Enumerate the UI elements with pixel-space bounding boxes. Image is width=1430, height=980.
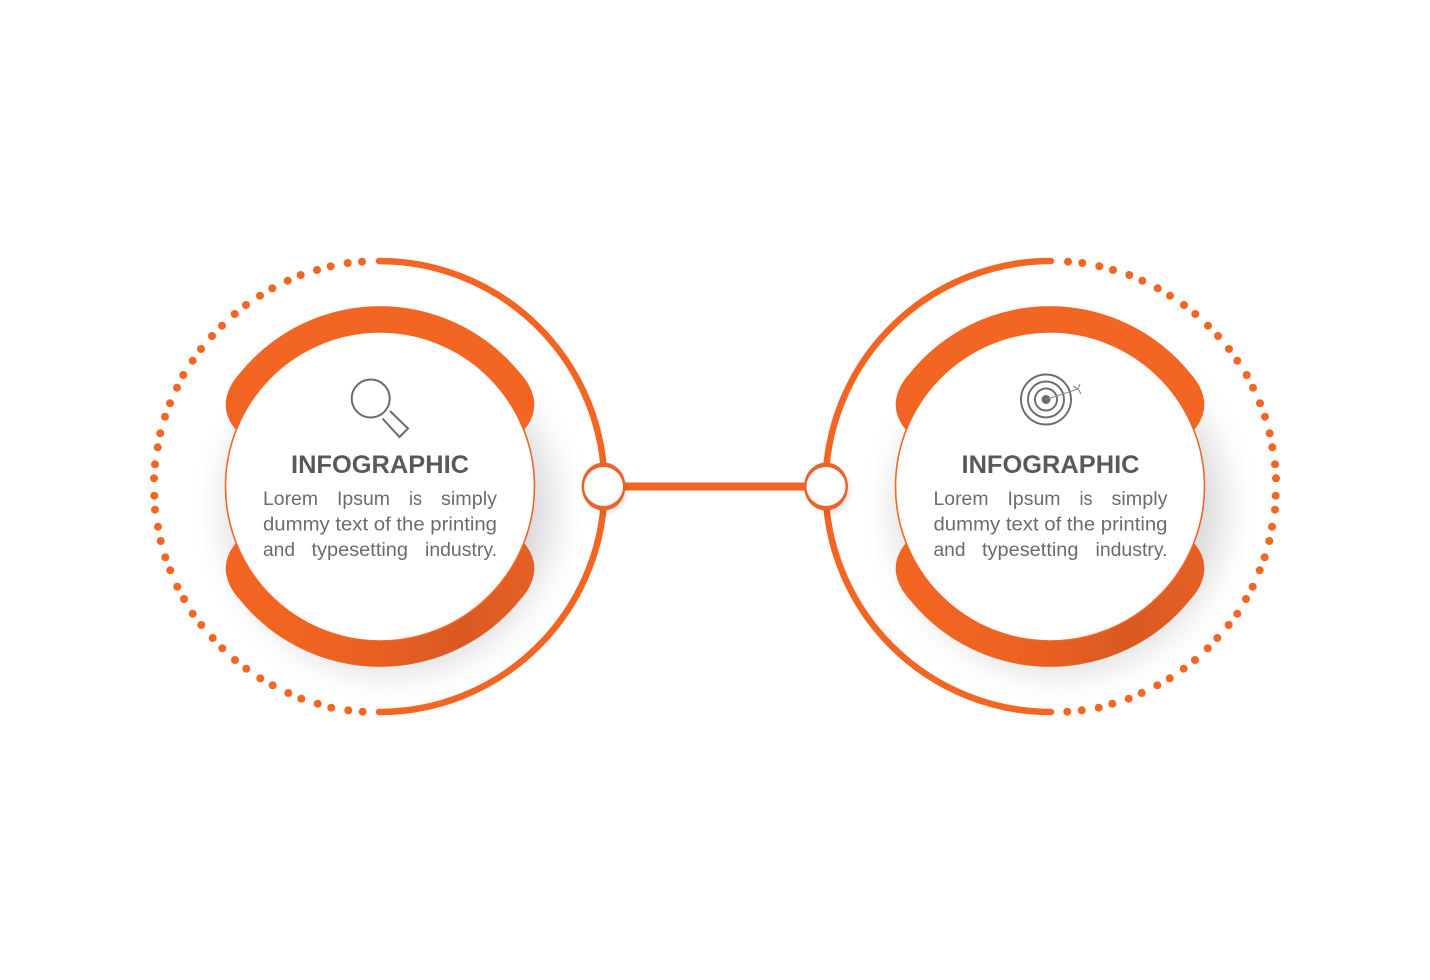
left body text: simply: [441, 489, 498, 510]
left body text: and: [263, 540, 295, 561]
left body text: [263, 489, 498, 561]
right dotted outer arc: [1063, 258, 1280, 716]
panel: left circle group: [150, 258, 604, 716]
left body text: Ipsum: [337, 489, 390, 510]
left connector node: [582, 462, 627, 513]
left solid outer arc: [379, 261, 604, 712]
left body text: industry.: [425, 540, 497, 561]
right solid outer arc: [825, 261, 1051, 712]
left body text: dummy text of the printing: [263, 514, 497, 536]
left shadow: [230, 348, 550, 668]
right white circle: [896, 332, 1204, 641]
left body text: is: [409, 489, 422, 510]
left body text: Lorem: [263, 489, 318, 510]
right body text: industry.: [1096, 540, 1168, 561]
left dotted outer arc: [150, 258, 367, 716]
connector line: [620, 482, 810, 490]
right top orange band: [896, 306, 1204, 430]
right body text: and: [934, 540, 966, 561]
right bottom orange band: [896, 543, 1204, 667]
left body text: typesetting: [312, 540, 408, 561]
right body text: is: [1080, 489, 1092, 510]
left top orange band: [226, 306, 534, 430]
left white circle: [226, 332, 534, 641]
icon: target with arrow: [1021, 374, 1081, 424]
right body text: typesetting: [982, 540, 1078, 561]
left bottom orange band: [226, 543, 534, 667]
right body text: simply: [1112, 489, 1168, 510]
right body text: dummy text of the printing: [934, 514, 1168, 536]
left heading: INFOGRAPHIC: [291, 451, 469, 479]
right body text: Ipsum: [1008, 489, 1060, 510]
icon: magnifying glass: [352, 380, 408, 437]
right body text: Lorem: [934, 489, 988, 510]
right connector node: [804, 462, 850, 513]
right shadow: [900, 348, 1220, 668]
right body text: [934, 489, 1168, 561]
panel: right circle group: [825, 258, 1280, 716]
right heading: INFOGRAPHIC: [962, 451, 1140, 479]
